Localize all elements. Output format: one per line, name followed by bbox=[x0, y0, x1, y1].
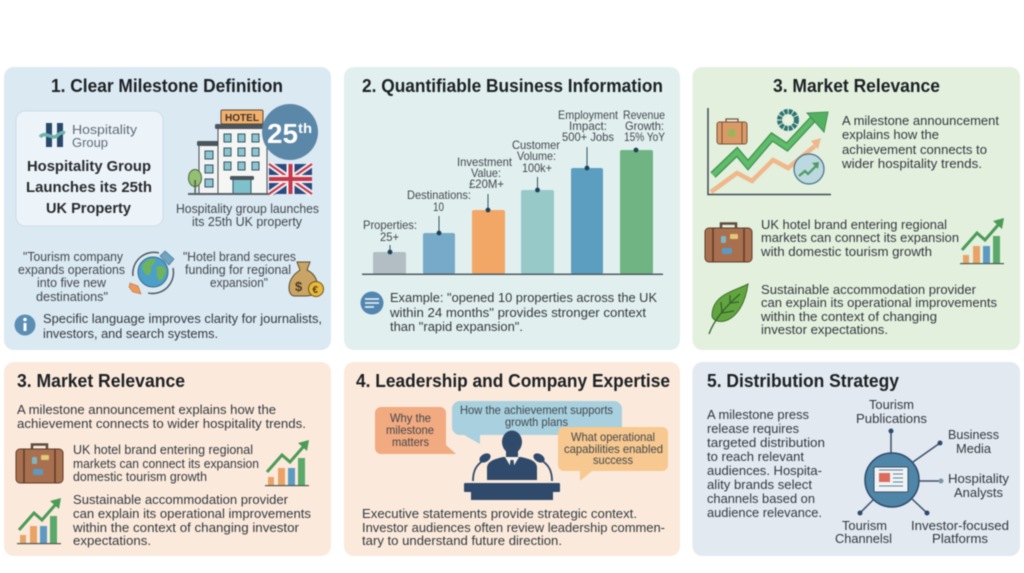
icon: leaf bbox=[709, 284, 748, 334]
speech bubble: operational capabilities: What operational bbox=[571, 430, 655, 444]
panel: distribution strategy bbox=[692, 362, 1020, 556]
speech bubble: operational capabilities bbox=[558, 427, 668, 481]
text: milestone announcement: achievement connects to bbox=[842, 142, 987, 157]
icon: UK flag bbox=[269, 164, 312, 194]
text: UK hotel brand: markets can connect its expansion bbox=[761, 230, 959, 245]
label: investor-focused platforms: Investor-focused bbox=[911, 518, 1009, 533]
bar chart: Volume: bbox=[517, 149, 556, 163]
heading: panel 3: 3. Market Relevance bbox=[773, 76, 940, 96]
text: executive statements: Executive statements provide strategic context. bbox=[362, 506, 637, 521]
logo headline card: UK Property bbox=[46, 200, 132, 217]
badge: 25th bbox=[262, 104, 318, 160]
intro text: achievement connects to wider hospitality trends. bbox=[17, 416, 306, 431]
diagram: distribution hub bbox=[858, 428, 944, 516]
bar chart: 15% YoY bbox=[624, 130, 665, 144]
icon: mini growth chart bbox=[265, 440, 309, 486]
bar chart: Revenue bbox=[623, 108, 665, 122]
caption: hotel: its 25th UK property bbox=[192, 215, 303, 229]
text: UK hotel brand: UK hotel brand entering regional bbox=[761, 217, 947, 232]
icon: mini growth chart bbox=[17, 498, 61, 544]
label: investor-focused platforms bbox=[911, 518, 1009, 546]
heading: panel 6: 5. Distribution Strategy bbox=[707, 371, 899, 391]
heading: panel 1: 1. Clear Milestone Definition bbox=[51, 76, 283, 96]
text: sustainable provider: Sustainable accommodation provider bbox=[761, 282, 977, 297]
text: sustainable provider: can explain its operational improvements bbox=[761, 295, 997, 310]
text: UK hotel brand: markets can connect its expansion bbox=[73, 456, 259, 471]
heading: panel 4: 3. Market Relevance bbox=[17, 371, 185, 391]
bar chart: £20M+ bbox=[469, 177, 504, 191]
text: sustainable provider: within the context of changing investor bbox=[72, 520, 300, 535]
text: distribution description: ality brands select bbox=[707, 477, 812, 492]
quote: hotel brand: funding for regional bbox=[185, 263, 291, 277]
example text: within 24 months" provides stronger context bbox=[389, 305, 646, 320]
text: executive statements: tary to understand future direction. bbox=[362, 533, 562, 548]
bar chart: Value: bbox=[471, 166, 501, 180]
bar chart: Employment bbox=[558, 108, 619, 122]
label: business media: Business bbox=[948, 427, 999, 442]
text: sustainable provider: within the context of changing bbox=[760, 309, 937, 324]
note: specific language: Specific language improves clarity for journalists, bbox=[43, 311, 322, 326]
text: milestone announcement: A milestone announcement bbox=[842, 113, 999, 128]
text: UK hotel brand: with domestic tourism growth bbox=[760, 244, 932, 259]
caption: hotel bbox=[176, 202, 319, 229]
icon: mini growth chart bbox=[960, 218, 1004, 264]
icon: hotel building: HOTEL bbox=[225, 112, 260, 124]
quote: hotel brand: "Hotel brand secures bbox=[183, 250, 296, 264]
intro text bbox=[17, 402, 306, 431]
bar chart bbox=[362, 108, 665, 275]
text: sustainable provider: investor expectations. bbox=[761, 322, 888, 337]
text: UK hotel brand: UK hotel brand entering regional bbox=[73, 442, 253, 457]
speech bubble: why the milestone matters: milestone bbox=[386, 423, 434, 437]
text: UK hotel brand: domestic tourism growth bbox=[73, 469, 207, 484]
text: sustainable provider: expectations. bbox=[73, 533, 151, 548]
icon: speaker at podium bbox=[464, 430, 560, 500]
label: hospitality analysts: Hospitality bbox=[948, 471, 1010, 486]
quote: hotel brand: expansion" bbox=[210, 276, 268, 290]
badge: 25th: th bbox=[298, 120, 312, 136]
bar chart: Destinations: bbox=[407, 188, 471, 202]
logo headline card bbox=[16, 111, 163, 226]
icon: suitcase bbox=[16, 444, 63, 483]
label: business media: Media bbox=[956, 441, 992, 456]
bar chart: 500+ Jobs bbox=[562, 130, 614, 144]
note: specific language: investors, and search systems. bbox=[43, 326, 218, 341]
text: distribution description: release requires bbox=[707, 421, 799, 436]
speech bubble: why the milestone matters: Why the bbox=[390, 411, 431, 425]
bar chart: Growth: bbox=[625, 119, 664, 133]
quote: tourism company: into five new bbox=[37, 276, 107, 290]
bar chart: Impact: bbox=[569, 119, 607, 133]
speech bubble: growth plans bbox=[452, 401, 622, 444]
text: milestone announcement: explains how the bbox=[842, 127, 939, 142]
text: distribution description: A milestone press bbox=[707, 407, 809, 422]
example text: Example: "opened 10 properties across the UK bbox=[390, 290, 657, 305]
speech bubble: why the milestone matters bbox=[375, 407, 456, 454]
example text: than "rapid expansion". bbox=[390, 319, 523, 334]
logo headline card: Group bbox=[72, 135, 108, 150]
bar chart: 25+ bbox=[380, 230, 399, 244]
label: tourism publications bbox=[856, 397, 927, 426]
text: sustainable provider bbox=[760, 282, 997, 337]
speech bubble: growth plans: How the achievement supports bbox=[460, 403, 613, 417]
label: tourism publications: Tourism bbox=[869, 397, 914, 412]
panel: leadership and company expertise bbox=[344, 362, 680, 556]
label: hospitality analysts: Analysts bbox=[954, 485, 1003, 500]
quote: tourism company: destinations" bbox=[36, 290, 108, 304]
example text bbox=[389, 290, 657, 334]
icon: money bag bbox=[289, 262, 324, 296]
speech bubble: operational capabilities: success bbox=[593, 453, 633, 467]
text: milestone announcement bbox=[841, 113, 999, 171]
text: distribution description: audience relevance. bbox=[707, 505, 822, 520]
panel: quantifiable business information bbox=[344, 67, 680, 350]
bar chart: Investment bbox=[457, 155, 513, 169]
logo headline card: Hospitality Group bbox=[27, 158, 151, 175]
text: distribution description: audiences. Hospita- bbox=[707, 463, 822, 478]
label: hospitality analysts bbox=[948, 471, 1010, 500]
text: sustainable provider: Sustainable accommodation provider bbox=[73, 492, 289, 507]
label: tourism publications: Publications bbox=[856, 411, 927, 426]
heading: panel 2: 2. Quantifiable Business Information bbox=[362, 76, 663, 96]
icon: text lines bbox=[360, 292, 384, 314]
text: executive statements: Investor audiences often review leadership commen- bbox=[362, 520, 665, 535]
label: business media bbox=[948, 427, 999, 456]
bar chart: 10 bbox=[433, 200, 444, 214]
icon: globe with arrows bbox=[129, 251, 174, 294]
line chart illustration bbox=[708, 108, 831, 194]
speech bubble: growth plans: growth plans bbox=[505, 415, 568, 429]
intro text: A milestone announcement explains how the bbox=[17, 402, 276, 417]
quote: hotel brand bbox=[183, 250, 296, 290]
bar chart: Customer bbox=[512, 138, 560, 152]
heading: panel 5: 4. Leadership and Company Expertise bbox=[356, 371, 670, 391]
logo headline card: Launches its 25th bbox=[26, 179, 152, 196]
quote: tourism company: "Tourism company bbox=[23, 250, 124, 264]
icon: money bag: $ bbox=[295, 279, 303, 294]
text: sustainable provider: can explain its operational improvements bbox=[73, 506, 311, 521]
icon: info bbox=[14, 314, 36, 336]
text: UK hotel brand bbox=[73, 442, 259, 484]
text: distribution description bbox=[707, 407, 825, 520]
bar chart: 100k+ bbox=[522, 161, 552, 175]
quote: tourism company: expands operations bbox=[18, 263, 125, 277]
text: distribution description: to reach relevant bbox=[707, 449, 804, 464]
panel: market relevance peach bbox=[4, 362, 331, 556]
text: distribution description: channels based on bbox=[707, 491, 815, 506]
logo headline card: Hospitality bbox=[72, 122, 138, 137]
panel: clear milestone definition bbox=[4, 67, 331, 350]
icon: money bag: € bbox=[312, 285, 318, 296]
caption: hotel: Hospitality group launches bbox=[176, 202, 319, 216]
badge: 25th: 25 bbox=[267, 118, 298, 149]
panel: market relevance green bbox=[692, 67, 1020, 350]
text: distribution description: targeted distribution bbox=[707, 435, 825, 450]
note: specific language bbox=[43, 311, 322, 341]
bar chart: Properties: bbox=[363, 218, 417, 232]
label: tourism channels: Tourism bbox=[842, 518, 887, 533]
icon: suitcase bbox=[705, 224, 752, 262]
quote: tourism company bbox=[18, 250, 125, 304]
label: tourism channels bbox=[835, 518, 892, 546]
speech bubble: why the milestone matters: matters bbox=[392, 435, 429, 449]
text: UK hotel brand bbox=[760, 217, 959, 259]
text: sustainable provider bbox=[72, 492, 311, 548]
label: tourism channels: Channelsl bbox=[835, 531, 892, 546]
speech bubble: operational capabilities: capabilities enabled bbox=[564, 442, 663, 456]
icon: hotel building bbox=[188, 110, 275, 195]
text: milestone announcement: wider hospitality trends. bbox=[841, 156, 982, 171]
label: investor-focused platforms: Platforms bbox=[932, 531, 989, 546]
text: executive statements bbox=[362, 506, 665, 548]
